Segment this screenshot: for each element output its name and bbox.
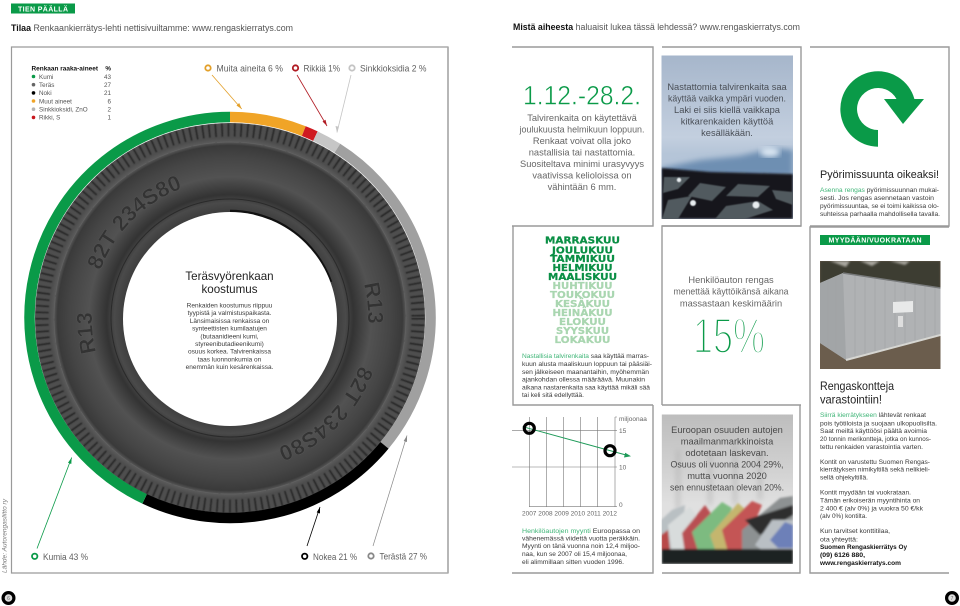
tyre illustration: R13 <box>76 314 96 354</box>
date text <box>519 113 644 192</box>
months text: kuun alusta maaliskuun loppuun tai pääsiäi- <box>522 361 652 368</box>
rotation text: Asenna rengas pyörimissuunnan mukai- <box>820 187 939 194</box>
legend table: Muut aineet <box>39 98 72 105</box>
date text: Suositeltava minimi urasyvyys <box>520 159 644 169</box>
photo caption <box>667 82 788 138</box>
centre text: taas luonnonkumia on <box>198 356 262 363</box>
label: sinkkioksidia: Sinkkioksidia 2 % <box>360 64 427 74</box>
containers text: Kontit on varustettu Suomen Rengas- <box>820 459 930 466</box>
legend table: Teräs <box>39 82 54 89</box>
centre title <box>185 270 274 296</box>
containers text: Saat meiltä käyttöösi päältä avoimia <box>820 428 927 435</box>
month list: JOULUKUU <box>551 246 613 256</box>
containers text: (09) 6126 880, <box>820 552 865 559</box>
source note: Lähde: Autorengasliitto ry <box>2 498 8 573</box>
legend table: Kumi <box>39 74 53 81</box>
header line right: Mistä aiheesta haluaisit lukea tässä lehdessä? www.rengaskierratys.com <box>513 22 800 33</box>
legend table: 21 <box>104 90 111 97</box>
legend table: 1 <box>107 115 111 122</box>
card: european car market <box>661 405 800 573</box>
months text: sen jälkeiseen maanantaihin, myöhemmän <box>522 369 649 376</box>
card: rotation direction <box>810 47 949 226</box>
containers text: www.rengaskierratys.com <box>819 560 901 567</box>
photo caption: mutta vuonna 2020 <box>687 471 767 481</box>
centre text <box>186 302 274 371</box>
months text: ajankohdan ollessa määräävä. Muunakin <box>522 376 645 384</box>
date text: Talvirenkaita on käytettävä <box>527 113 638 123</box>
line chart: 15 <box>619 428 627 435</box>
line chart: 2007 2008 2009 2010 2011 2012 <box>522 510 617 518</box>
containers text: (alv 0%) kontilta. <box>820 513 867 520</box>
rotation heading: Pyörimissuunta oikeaksi! <box>820 169 939 181</box>
centre text: Renkaiden koostumus riippuu <box>187 302 273 310</box>
photo caption: Laki ei siis kiellä vaikkapa <box>674 105 781 115</box>
label: nokea <box>302 507 357 563</box>
composition ring <box>30 117 431 518</box>
photo caption: kesälläkään. <box>701 128 753 138</box>
wear text: Henkilöauton rengas <box>688 275 774 285</box>
section tag: tien päällä <box>11 4 75 14</box>
month list: SYYSKUU <box>556 326 609 337</box>
card: studded tyre months <box>513 226 653 405</box>
month list: TAMMIKUU <box>550 254 615 265</box>
label: muita aineita <box>205 64 283 109</box>
month list: ELOKUU <box>559 317 606 328</box>
label: terästä: Terästä 27 % <box>380 552 427 562</box>
legend table: Noki <box>39 90 52 97</box>
rotation text <box>820 187 940 218</box>
line chart: miljoonaa <box>619 416 647 423</box>
containers text: Suomen Rengaskierrätys Oy <box>820 544 907 551</box>
icon: rotation arrow <box>840 71 924 147</box>
photo caption: odotetaan laskevan. <box>685 448 769 458</box>
photo caption: Nastattomia talvirenkaita saa <box>667 82 788 92</box>
page number left <box>3 593 14 603</box>
label: rikkiä: Rikkiä 1% <box>304 64 340 74</box>
date text: vähintään 6 mm. <box>548 182 616 192</box>
legend table: Sinkkioksidi, ZnO <box>39 106 88 114</box>
containers text <box>819 412 937 567</box>
rotation text: pyörimissuuntaa, se ei toimi kaikissa olo- <box>820 203 939 210</box>
month list: MARRASKUU <box>545 236 620 247</box>
wear text: massastaan keskimäärin <box>680 299 782 309</box>
line chart: 10 <box>619 464 627 472</box>
big percentage: 15% <box>693 308 765 364</box>
card: car sales chart <box>512 405 653 573</box>
photo caption: sen ennustetaan olevan 20%. <box>670 482 784 492</box>
tyre illustration <box>35 122 426 513</box>
page number right: 7 <box>951 596 954 602</box>
month list: HEINÄKUU <box>552 308 612 319</box>
centre title: Teräsvyörenkaan <box>185 270 274 283</box>
photo caption: Osuus oli vuonna 2004 29%, <box>670 459 784 469</box>
card: studless tyres <box>661 47 801 226</box>
containers text: pois työtiloista ja suojaan ulkopuolisilta. <box>820 420 937 428</box>
header line left: Tilaa Renkaankierrätys-lehti nettisivuiltamme: www.rengaskierratys.com <box>11 23 293 34</box>
legend table: 6 <box>107 98 111 105</box>
panel: tyre composition <box>10 46 449 574</box>
date text: nastallisia tai nastattomia. <box>529 148 635 158</box>
section tag: myydään/vuokrataan: MYYDÄÄN/VUOKRATAAN <box>828 237 922 245</box>
tyre illustration: 82T 234S80 <box>280 368 372 460</box>
chart text: Henkilöautojen myynti Euroopassa on <box>522 528 640 535</box>
containers text: ota yhteyttä: <box>820 536 858 544</box>
legend table: 43 <box>104 74 111 81</box>
rotation text: sesti. Jos rengas asennetaan vastoin <box>820 195 934 202</box>
line chart: 0 <box>619 502 623 509</box>
centre text: enemmän kuin kesärenkaissa. <box>186 364 274 371</box>
tyre illustration: R13 <box>364 282 384 322</box>
label: nokea: Nokea 21 % <box>313 552 357 563</box>
containers text: tettu renkaiden varastointia varten. <box>820 444 923 451</box>
photo caption <box>670 425 784 492</box>
legend table: Rikki, S <box>39 115 60 122</box>
date text: vaativissa kelioloissa on <box>532 170 632 180</box>
tyre illustration: 82T 234S80 <box>88 176 180 268</box>
containers text: Kun tarvitset konttitilaa, <box>820 528 890 535</box>
chart text: Myynti on tänä vuonna noin 12,4 miljoo- <box>522 543 640 550</box>
containers text: 2 400 € (alv 0%) ja vuokra 50 €/kk <box>820 506 924 512</box>
label: sinkkioksidia <box>336 64 427 132</box>
label: rikkiä <box>293 64 340 126</box>
months text: tai keli sitä edellyttää. <box>522 392 584 399</box>
chart text: naa, kun se 2007 oli 15,4 miljoonaa, <box>522 551 627 558</box>
containers heading: Rengaskontteja <box>820 379 894 393</box>
month list <box>545 236 620 346</box>
containers text: Siirrä kierrätykseen lähtevät renkaat <box>820 412 926 419</box>
chart text: vähenemässä viidettä vuotta peräkkäin. <box>522 536 640 542</box>
page number right <box>947 593 957 603</box>
centre text: tyypistä ja valmistuspaikasta. <box>188 310 272 317</box>
legend table: Renkaan raaka-aineet <box>32 66 99 72</box>
month list: KESÄKUU <box>555 299 610 310</box>
month list: MAALISKUU <box>548 272 617 283</box>
photo caption: maailmanmarkkinoista <box>681 437 774 447</box>
wear text: menettää käyttöikänsä aikana <box>674 287 789 297</box>
legend table: % <box>105 66 111 72</box>
centre title: koostumus <box>201 283 258 296</box>
chart text: eli alimmillaan sitten vuoden 1996. <box>522 559 624 566</box>
date text: Renkaat voivat olla joko <box>533 136 631 146</box>
card: tyre containers <box>810 227 949 573</box>
section tag: myydään/vuokrataan <box>820 235 930 245</box>
centre text: styreenibutadieenikumi) <box>195 341 264 348</box>
card: winter tyre dates <box>512 47 653 226</box>
legend table: 27 <box>104 82 111 89</box>
label: kumia: Kumia 43 % <box>43 552 88 563</box>
month list: TOUKOKUU <box>550 290 615 301</box>
legend table: 2 <box>107 106 111 114</box>
centre text: synteettisten kumilaatujen <box>192 326 267 333</box>
line chart <box>512 416 647 518</box>
label: terästä <box>368 436 427 562</box>
rotation text: suhteissa parhaalla mahdollisella tavalla. <box>820 211 940 218</box>
photo caption: käyttää vaikka ympäri vuoden. <box>668 93 786 103</box>
months text: aikana nastarenkaita saa käyttää mikäli sää <box>522 384 650 392</box>
date text: joulukuusta helmikuun loppuun. <box>519 124 644 134</box>
month list: HUHTIKUU <box>552 281 612 292</box>
page number left: 6 <box>7 596 10 602</box>
centre text: (butaanidieeni kumi, <box>200 333 259 340</box>
section tag: tien päällä: TIEN PÄÄLLÄ <box>18 5 68 13</box>
containers text: sellä ohjekyltillä. <box>820 474 868 482</box>
photo: studded tyre on ice <box>661 56 793 219</box>
legend table <box>32 66 111 122</box>
photo: row of cars <box>661 414 793 564</box>
months text <box>522 353 652 399</box>
wear text <box>674 275 789 309</box>
label: kumia <box>32 458 88 563</box>
photo caption: Euroopan osuuden autojen <box>671 425 783 435</box>
centre text: Länsimaisissa renkaissa on <box>190 318 270 325</box>
chart text <box>522 528 640 566</box>
label: muita aineita: Muita aineita 6 % <box>216 64 283 74</box>
containers text: kierrätyksen nimikyltillä sekä nelikieli- <box>820 466 930 474</box>
containers heading <box>820 379 894 406</box>
months text: Nastallisia talvirenkaita saa käyttää marras- <box>522 353 649 360</box>
photo: shipping container <box>820 261 940 369</box>
containers text: 20 tonnin merikontteja, jotka on kunnos- <box>820 436 931 443</box>
centre text: osuus korkea. Talvirenkaissa <box>188 349 271 356</box>
month list: HELMIKUU <box>552 263 612 274</box>
month list: LOKAKUU <box>554 335 610 346</box>
containers text: Kontit myydään tai vuokrataan. <box>820 490 911 496</box>
containers text: Tämän erikoiserän myyntihinta on <box>820 498 920 504</box>
card: tyre wear <box>662 226 801 405</box>
big date: 1.12.-28.2. <box>523 80 641 110</box>
photo caption: kitkarenkaiden käyttöä <box>681 116 774 126</box>
containers heading: varastointiin! <box>820 392 882 406</box>
